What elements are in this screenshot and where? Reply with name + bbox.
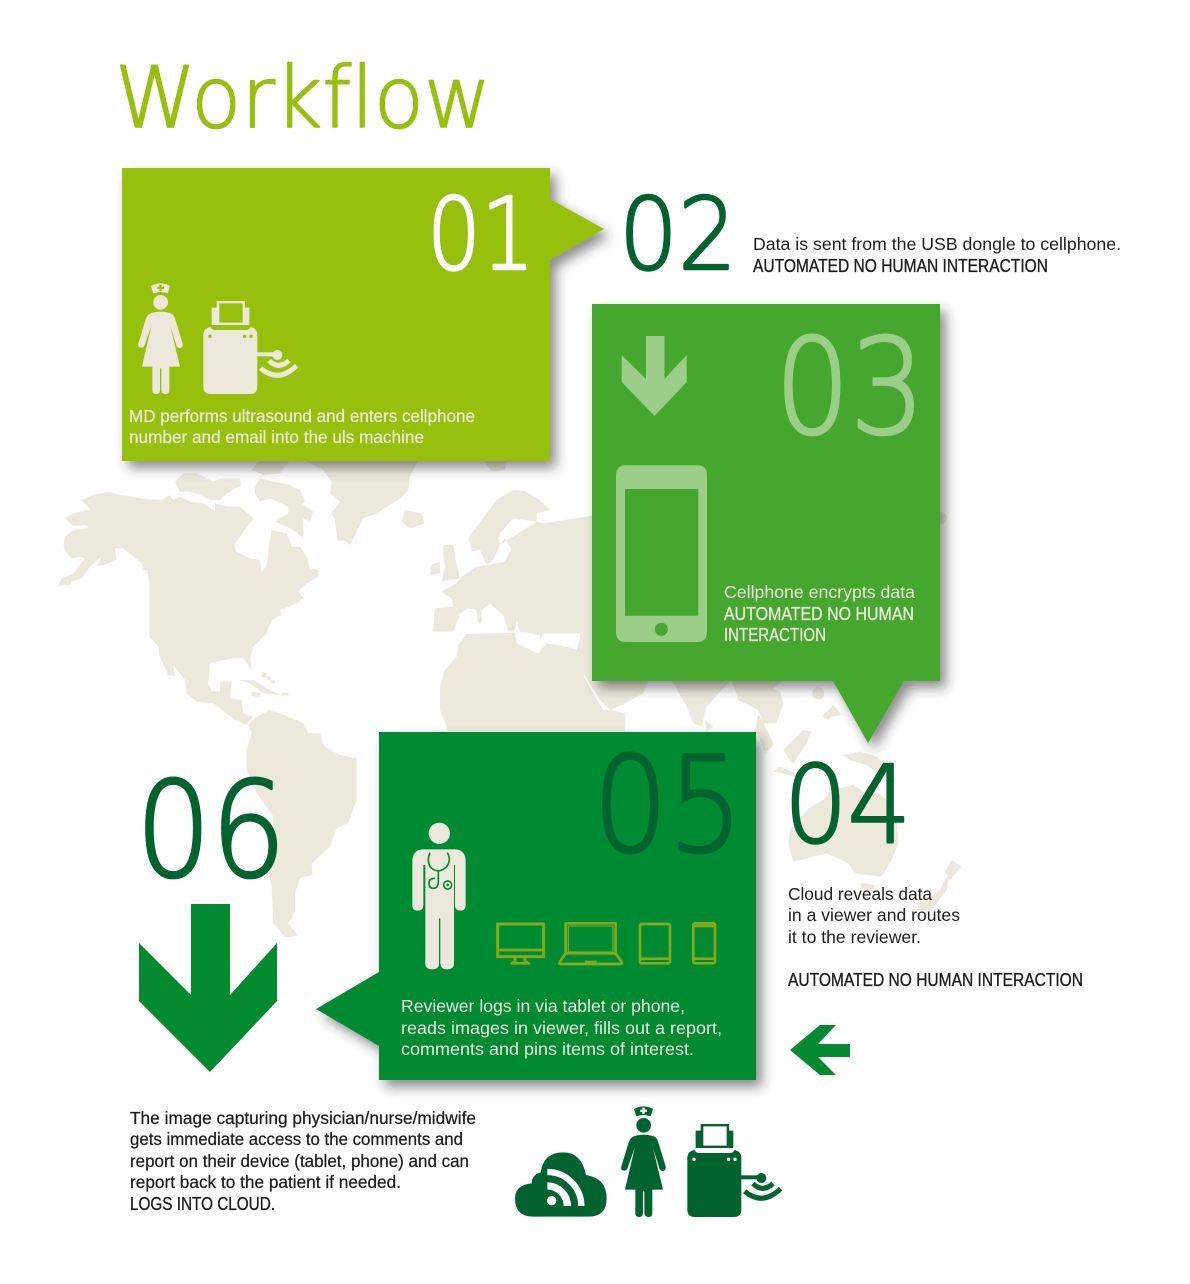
number 01: 01 [427,176,535,293]
step 03 text: Cellphone encrypts data [724,582,915,602]
icon: nurse [138,283,183,394]
step 04 text: in a viewer and routes [788,905,960,925]
icon: cellphone [616,465,707,642]
step 04 number: 04 [784,744,911,868]
step 02 number: 02 [619,176,737,293]
step 02 text: AUTOMATED NO HUMAN INTERACTION [753,255,1048,276]
icon: ultrasound machine [203,301,297,394]
step 01 text: number and email into the uls machine [129,427,424,447]
panel: step 03 [592,304,940,743]
step 03 text [724,582,915,645]
step 04 text: it to the reviewer. [788,927,921,947]
world map background [58,460,962,937]
step 01 text [129,406,475,447]
step 04 text: AUTOMATED NO HUMAN INTERACTION [788,969,1083,990]
step 05 text: reads images in viewer, fills out a report, [401,1018,722,1038]
number 03: 03 [775,311,925,465]
step 03 text: AUTOMATED NO HUMAN [724,603,914,624]
step 06 text: report on their device (tablet, phone) and can [130,1151,469,1171]
icon: cloud with signal [515,1152,607,1217]
title: Workflow [115,49,491,148]
step 01 text: MD performs ultrasound and enters cellphone [129,406,475,426]
step 06 text: gets immediate access to the comments and [130,1129,463,1149]
panel: step 01 [122,168,604,461]
icon: left arrow [790,1025,850,1075]
step 05 text: Reviewer logs in via tablet or phone, [401,996,685,1016]
icons: monitor, laptop, tablet, phone [498,923,715,964]
step 04 text [788,884,1083,990]
icon: down arrow [622,336,687,416]
icon: doctor with stethoscope [412,823,466,969]
step 02 text [753,234,1121,276]
icon: large down arrow [139,904,277,1072]
step 06 text: The image capturing physician/nurse/midwife [130,1108,476,1128]
step 06 number: 06 [136,754,286,908]
step 05 text [401,996,722,1059]
step 06 text: report back to the patient if needed. [130,1172,401,1192]
icon: ultrasound machine, dark [687,1124,781,1217]
step 04 text: Cloud reveals data [788,884,932,904]
step 05 text: comments and pins items of interest. [401,1039,694,1059]
number 05: 05 [593,729,743,883]
step 03 text: INTERACTION [724,624,826,645]
step 06 text [130,1108,476,1214]
icon: nurse, dark [621,1106,666,1217]
step 02 text: Data is sent from the USB dongle to cellphone. [753,234,1121,254]
panel: step 05 [316,729,756,1080]
step 06 text: LOGS INTO CLOUD. [130,1193,275,1214]
